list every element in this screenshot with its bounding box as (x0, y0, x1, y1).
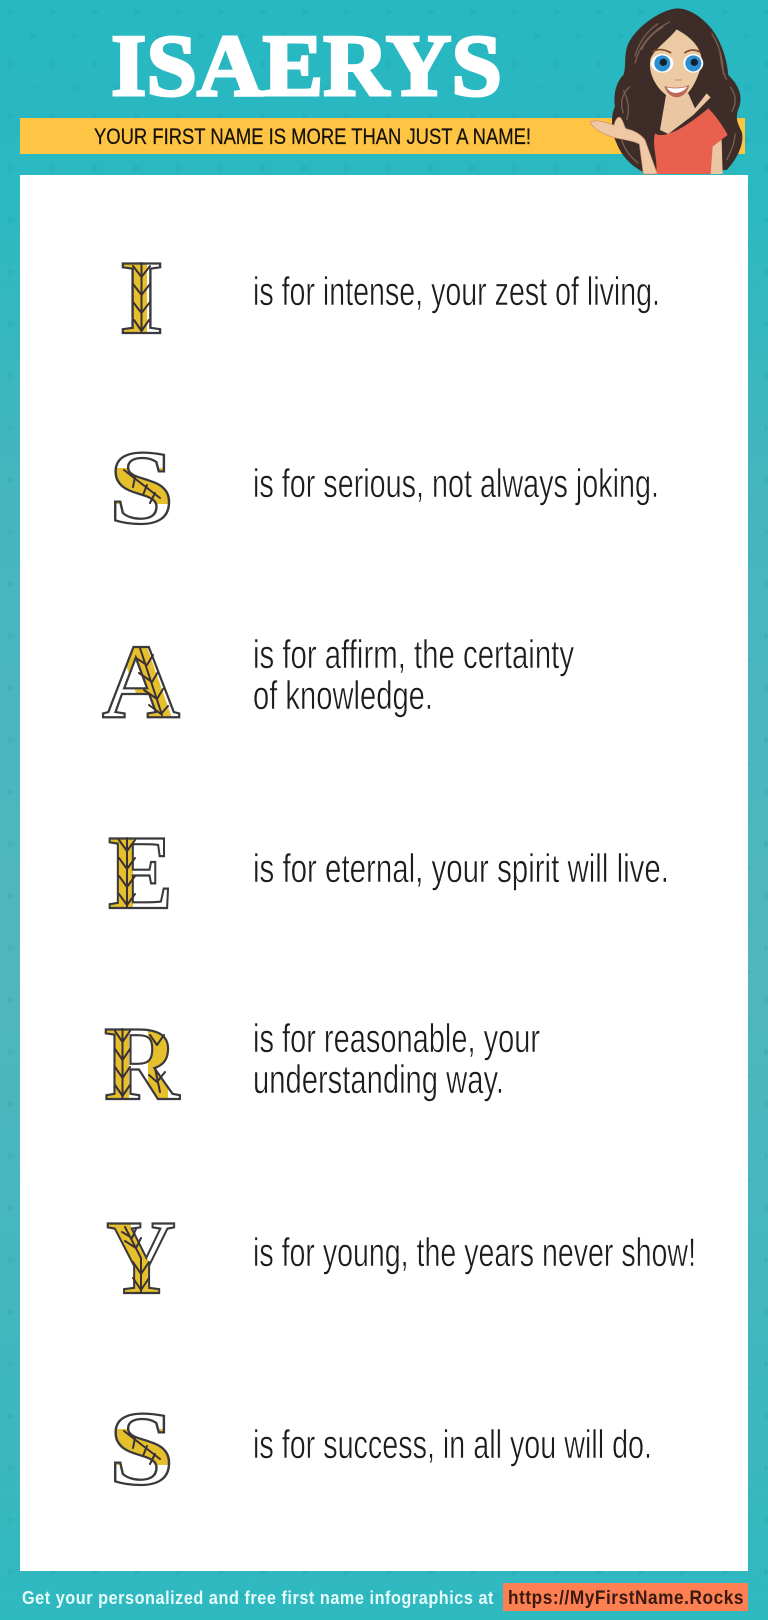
eyes (651, 54, 703, 73)
row: Y (106, 1199, 696, 1316)
row: E (108, 814, 669, 931)
tagline: YOUR FIRST NAME IS MORE THAN JUST A NAME! (94, 124, 531, 149)
row: R (104, 1005, 540, 1122)
hair (612, 8, 742, 173)
footer text: Get your personalized and free first name infographics at (22, 1588, 494, 1608)
face (650, 29, 702, 99)
text: A: of knowledge. (253, 674, 433, 718)
footer (22, 1583, 748, 1611)
row: S (second) (109, 1390, 652, 1507)
text: R: is for reasonable, your (253, 1017, 540, 1061)
neck and arm (660, 93, 711, 134)
letter R: R (104, 1005, 180, 1122)
row: S (109, 429, 659, 546)
link badge: https://MyFirstName.Rocks (508, 1588, 744, 1609)
text: A (253, 633, 574, 718)
hand and forearm (590, 117, 657, 174)
title: ISAERYS (111, 18, 502, 115)
row: I (119, 239, 660, 356)
text: A: is for affirm, the certainty (253, 633, 574, 677)
letter E: E (108, 814, 173, 931)
shirt (654, 108, 728, 174)
eyebrows (653, 50, 700, 53)
mouth (664, 85, 689, 97)
text: R: understanding way. (253, 1058, 504, 1102)
letter I: I (119, 239, 164, 356)
icon: cartoon woman (590, 8, 742, 174)
text: R (253, 1017, 540, 1102)
letter A: A (102, 623, 180, 740)
row: A (102, 623, 574, 740)
letter Y: Y (106, 1199, 176, 1316)
link badge (503, 1583, 748, 1611)
letter S: S (109, 429, 174, 546)
banner (20, 118, 745, 154)
letter S: S (109, 1390, 174, 1507)
